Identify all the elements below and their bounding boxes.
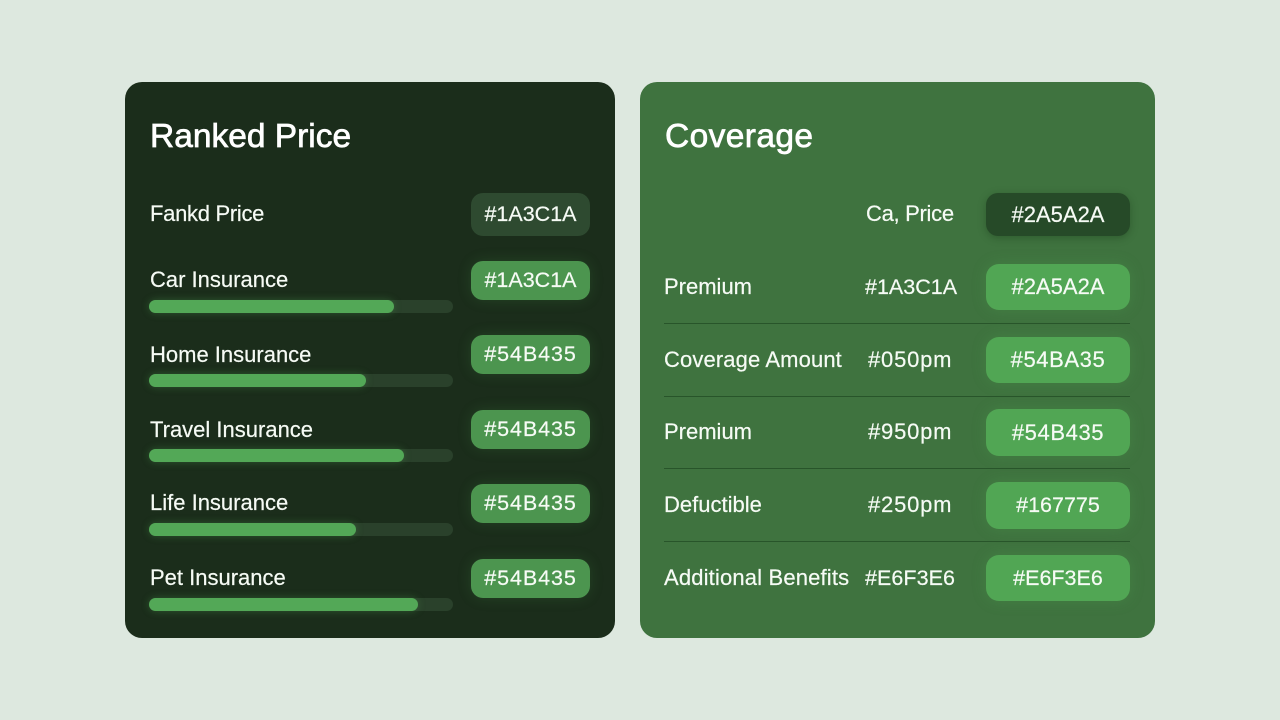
label: home insurance: Home Insurance [150, 342, 311, 367]
row: travel insurance [147, 408, 592, 465]
progress bar: home insurance [149, 374, 453, 387]
row: additional benefits [664, 555, 1130, 601]
value pill: pet insurance [471, 559, 590, 598]
value: premium: #1A3C1A [865, 275, 957, 299]
row: pet insurance [147, 557, 592, 614]
value pill: life insurance [471, 484, 590, 523]
label: travel insurance: Travel Insurance [150, 417, 313, 442]
value pill: coverage amount [986, 337, 1130, 383]
value pill: premium 2: #54B435 [1012, 420, 1104, 444]
value pill: pet insurance: #54B435 [484, 566, 577, 590]
heading: ranked price: Ranked Price [150, 118, 351, 155]
row: deductible [664, 482, 1130, 529]
value pill: coverage amount: #54BA35 [1011, 347, 1105, 372]
header pill [471, 193, 590, 236]
value pill: travel insurance: #54B435 [484, 417, 577, 441]
label: additional benefits: Additional Benefits [664, 565, 849, 590]
label: premium 2: Premium [664, 419, 752, 444]
value pill: car insurance [471, 261, 590, 300]
row: car insurance [147, 259, 592, 316]
progress bar: travel insurance [149, 449, 453, 462]
panel: ranked price [125, 82, 615, 638]
value pill: premium [986, 264, 1130, 310]
value: additional benefits: #E6F3E6 [865, 566, 955, 590]
progress bar: car insurance [149, 300, 453, 313]
value pill: home insurance: #54B435 [484, 342, 577, 366]
value pill: premium 2 [986, 409, 1130, 456]
row label: Fankd Price: Fankd Price [150, 201, 264, 226]
label: premium: Premium [664, 274, 752, 299]
header pill: #1A3C1A [484, 202, 577, 226]
value pill: home insurance [471, 335, 590, 374]
value pill: life insurance: #54B435 [484, 491, 577, 515]
progress bar: life insurance [149, 523, 453, 536]
row: premium 2 [664, 409, 1130, 456]
value pill: additional benefits [986, 555, 1130, 601]
heading: coverage: Coverage [665, 118, 813, 155]
progress bar: pet insurance [149, 598, 453, 611]
row: coverage amount [664, 337, 1130, 383]
value pill: deductible [986, 482, 1130, 529]
value pill: car insurance: #1A3C1A [484, 268, 577, 292]
label: coverage amount: Coverage Amount [664, 347, 842, 372]
row: life insurance [147, 482, 592, 539]
header pill [986, 193, 1130, 236]
row: premium [664, 264, 1130, 310]
value: coverage amount: #050pm [868, 347, 952, 372]
value pill: deductible: #167775 [1016, 493, 1100, 517]
panel: coverage [640, 82, 1155, 638]
value pill: travel insurance [471, 410, 590, 449]
header pill: #2A5A2A [1012, 202, 1104, 226]
label: life insurance: Life Insurance [150, 490, 288, 515]
label: pet insurance: Pet Insurance [150, 565, 286, 590]
value pill: premium: #2A5A2A [1012, 274, 1104, 299]
row: home insurance [147, 333, 592, 390]
value: deductible: #250pm [868, 492, 952, 517]
label: car insurance: Car Insurance [150, 267, 288, 292]
value: premium 2: #950pm [868, 419, 952, 444]
value pill: additional benefits: #E6F3E6 [1013, 566, 1103, 590]
label: deductible: Defuctible [664, 492, 762, 517]
column label: Ca, Price: Ca, Price [866, 201, 954, 226]
